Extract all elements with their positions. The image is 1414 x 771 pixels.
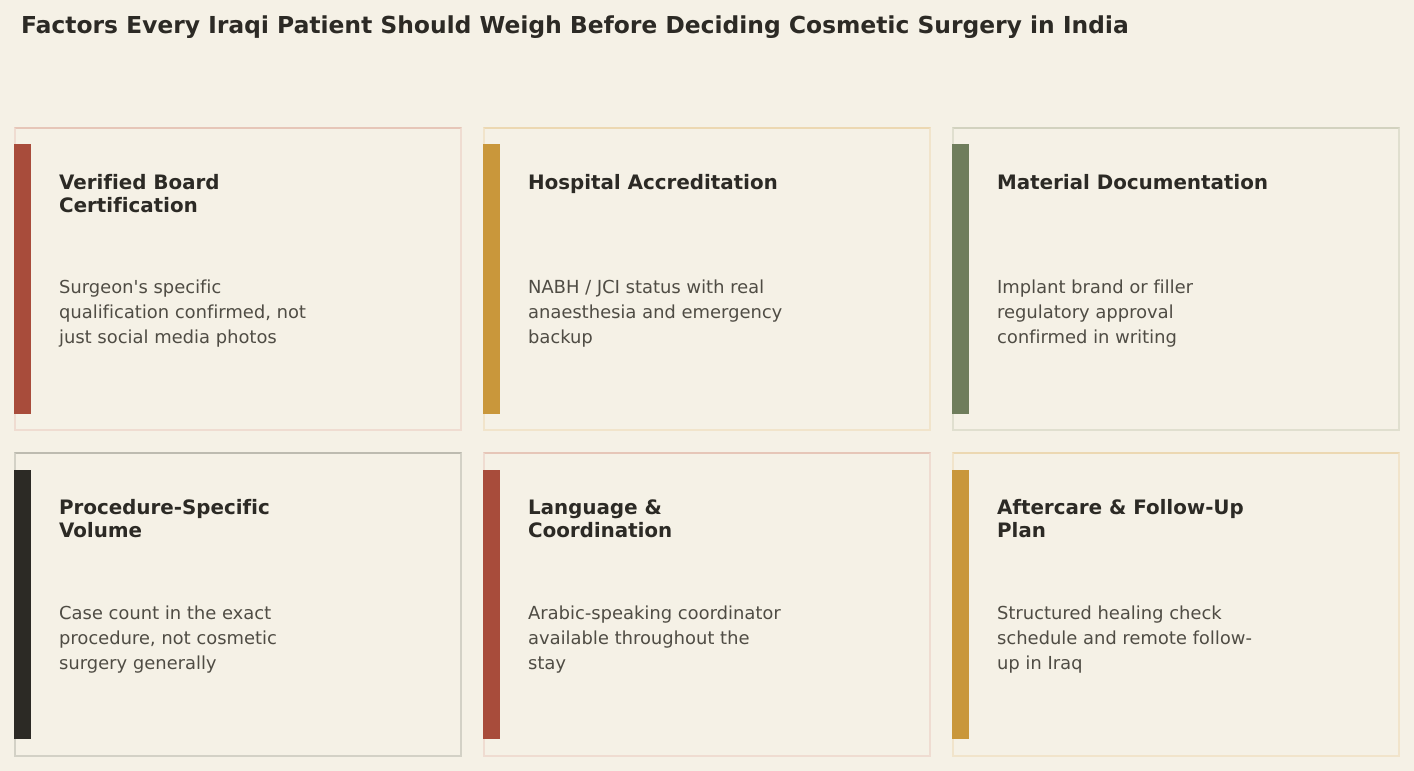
- accent bar: gold: [952, 470, 969, 739]
- heading: aftercare and follow-up plan: [997, 496, 1244, 542]
- title: Factors Every Iraqi Patient Should Weigh Before Deciding Cosmetic Surgery in India: [21, 11, 1129, 39]
- text: procedure-specific volume description: surgery generally: [59, 653, 217, 674]
- text: verified board certification description: Surgeon's specific: [59, 277, 221, 298]
- accent bar: black: [14, 470, 31, 739]
- panel: aftercare and follow-up plan: [952, 452, 1400, 757]
- heading: language and coordination: Coordination: [528, 519, 672, 542]
- heading: verified board certification: [59, 171, 219, 217]
- accent bar: red: [14, 144, 31, 414]
- accent bar: red: [483, 470, 500, 739]
- text: procedure-specific volume description: procedure, not cosmetic: [59, 628, 277, 649]
- heading: procedure-specific volume: Volume: [59, 519, 142, 542]
- accent bar: gold: [483, 144, 500, 414]
- text: hospital accreditation description: backup: [528, 327, 593, 348]
- text: language and coordination description: stay: [528, 653, 566, 674]
- panel: verified board certification: [14, 127, 462, 431]
- text: aftercare and follow-up plan description: [997, 603, 1252, 674]
- heading: language and coordination: [528, 496, 672, 542]
- text: material documentation description: [997, 277, 1193, 348]
- text: aftercare and follow-up plan description: Structured healing check: [997, 603, 1222, 624]
- text: verified board certification description: [58, 277, 306, 348]
- text: material documentation description: Implant brand or filler: [997, 277, 1193, 298]
- panel: language and coordination: [483, 452, 931, 757]
- text: language and coordination description: [528, 603, 781, 674]
- text: hospital accreditation description: anaesthesia and emergency: [528, 302, 782, 323]
- panel: procedure-specific volume: [14, 452, 462, 757]
- text: language and coordination description: available throughout the: [528, 628, 749, 649]
- accent bar: green: [952, 144, 969, 414]
- heading: procedure-specific volume: Procedure-Specific: [59, 496, 270, 519]
- heading: hospital accreditation: Hospital Accreditation: [528, 171, 778, 194]
- heading: procedure-specific volume: [59, 496, 270, 542]
- heading: material documentation: Material Documentation: [997, 171, 1268, 194]
- heading: aftercare and follow-up plan: Plan: [997, 519, 1046, 542]
- text: aftercare and follow-up plan description: schedule and remote follow-: [997, 628, 1252, 649]
- text: hospital accreditation description: NABH / JCI status with real: [528, 277, 764, 298]
- text: verified board certification description: qualification confirmed, not: [59, 302, 306, 323]
- text: material documentation description: regulatory approval: [997, 302, 1174, 323]
- heading: verified board certification: Verified Board: [59, 171, 219, 194]
- text: procedure-specific volume description: [59, 603, 277, 674]
- text: language and coordination description: Arabic-speaking coordinator: [528, 603, 781, 624]
- text: hospital accreditation description: [528, 277, 782, 348]
- heading: aftercare and follow-up plan: Aftercare & Follow-Up: [997, 496, 1244, 519]
- text: aftercare and follow-up plan description: up in Iraq: [997, 653, 1082, 674]
- heading: verified board certification: Certification: [59, 194, 198, 217]
- panel: material documentation: [952, 127, 1400, 431]
- panel: hospital accreditation: [483, 127, 931, 431]
- text: procedure-specific volume description: Case count in the exact: [59, 603, 271, 624]
- text: verified board certification description: just social media photos: [59, 327, 277, 348]
- heading: language and coordination: Language &: [528, 496, 662, 519]
- text: material documentation description: confirmed in writing: [997, 327, 1177, 348]
